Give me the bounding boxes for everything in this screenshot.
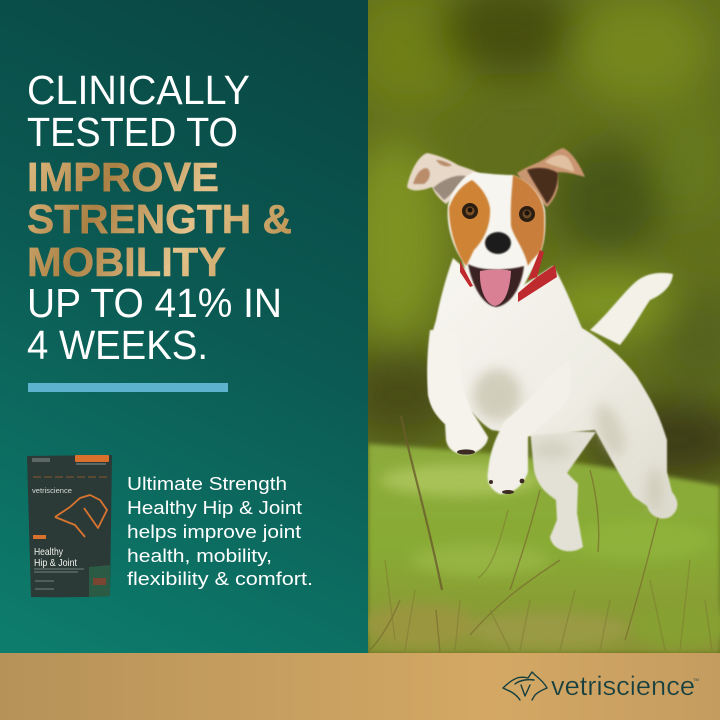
dog <box>407 148 677 551</box>
description line 3: helps improve joint <box>127 521 301 542</box>
pouch detail lines <box>34 569 84 589</box>
dog paw toes <box>457 449 524 494</box>
dog tail <box>590 273 673 345</box>
product pouch <box>27 455 112 597</box>
headline <box>27 67 292 368</box>
headline line: Improve: IMPROVE <box>27 154 219 200</box>
product description <box>127 473 313 589</box>
grass field <box>365 416 720 653</box>
pouch red mark <box>93 578 106 585</box>
dog right ear <box>517 148 585 207</box>
dog rear leg (back) <box>530 430 596 551</box>
headline line: Up to 41% in: UP TO 41% IN <box>27 280 282 326</box>
description line 5: flexibility & comfort. <box>127 568 313 589</box>
photo: jumping dog on grass <box>340 0 720 653</box>
headline line: Clinically: CLINICALLY <box>27 67 250 113</box>
brand logo <box>503 671 699 701</box>
dog body shading <box>473 369 662 512</box>
accent bar <box>28 383 228 392</box>
description line 1: Ultimate Strength <box>127 473 287 494</box>
dog left ear speckle <box>413 160 452 184</box>
dog eyes <box>462 203 535 222</box>
logo icon: dog head <box>503 672 547 700</box>
headline line: Mobility: MOBILITY <box>27 239 226 285</box>
pouch brand: vetriscience <box>32 486 72 495</box>
pouch body <box>27 455 112 597</box>
headline line: Strength &: STRENGTH & <box>27 196 292 242</box>
pouch orange dashes <box>33 476 107 478</box>
dog left ear inner <box>433 176 466 200</box>
pouch small tag <box>33 535 46 539</box>
dog collar <box>460 250 557 302</box>
pouch green panel <box>89 565 110 597</box>
pouch subtitle: Hip & Joint <box>34 557 77 569</box>
dog left front leg <box>427 330 488 455</box>
dog nose <box>485 232 511 254</box>
pouch tag <box>75 455 109 462</box>
dog left face patch <box>449 180 490 266</box>
dog body <box>428 258 677 519</box>
logo trademark: TM <box>693 677 699 682</box>
footer gold band <box>0 653 720 720</box>
dog tongue <box>480 270 511 306</box>
dog mouth <box>468 264 524 307</box>
headline line: 4 weeks: 4 WEEKS. <box>27 322 208 368</box>
pouch dog mark <box>55 495 107 537</box>
dog right front leg <box>486 404 530 495</box>
dog right ear highlight <box>545 155 574 172</box>
photo background <box>340 0 720 653</box>
panel: teal text panel <box>0 0 368 653</box>
dog head <box>448 172 545 307</box>
dog right face patch <box>511 175 544 266</box>
headline line: Tested to: TESTED TO <box>27 109 238 155</box>
dog left ear <box>407 153 480 204</box>
description line 4: health, mobility, <box>127 545 272 566</box>
pouch title: Healthy <box>34 546 64 558</box>
pouch header lines <box>32 459 106 464</box>
dog right ear inner <box>527 168 558 204</box>
description line 2: Healthy Hip & Joint <box>127 497 302 518</box>
logo wordmark: vetriscience <box>551 671 695 701</box>
